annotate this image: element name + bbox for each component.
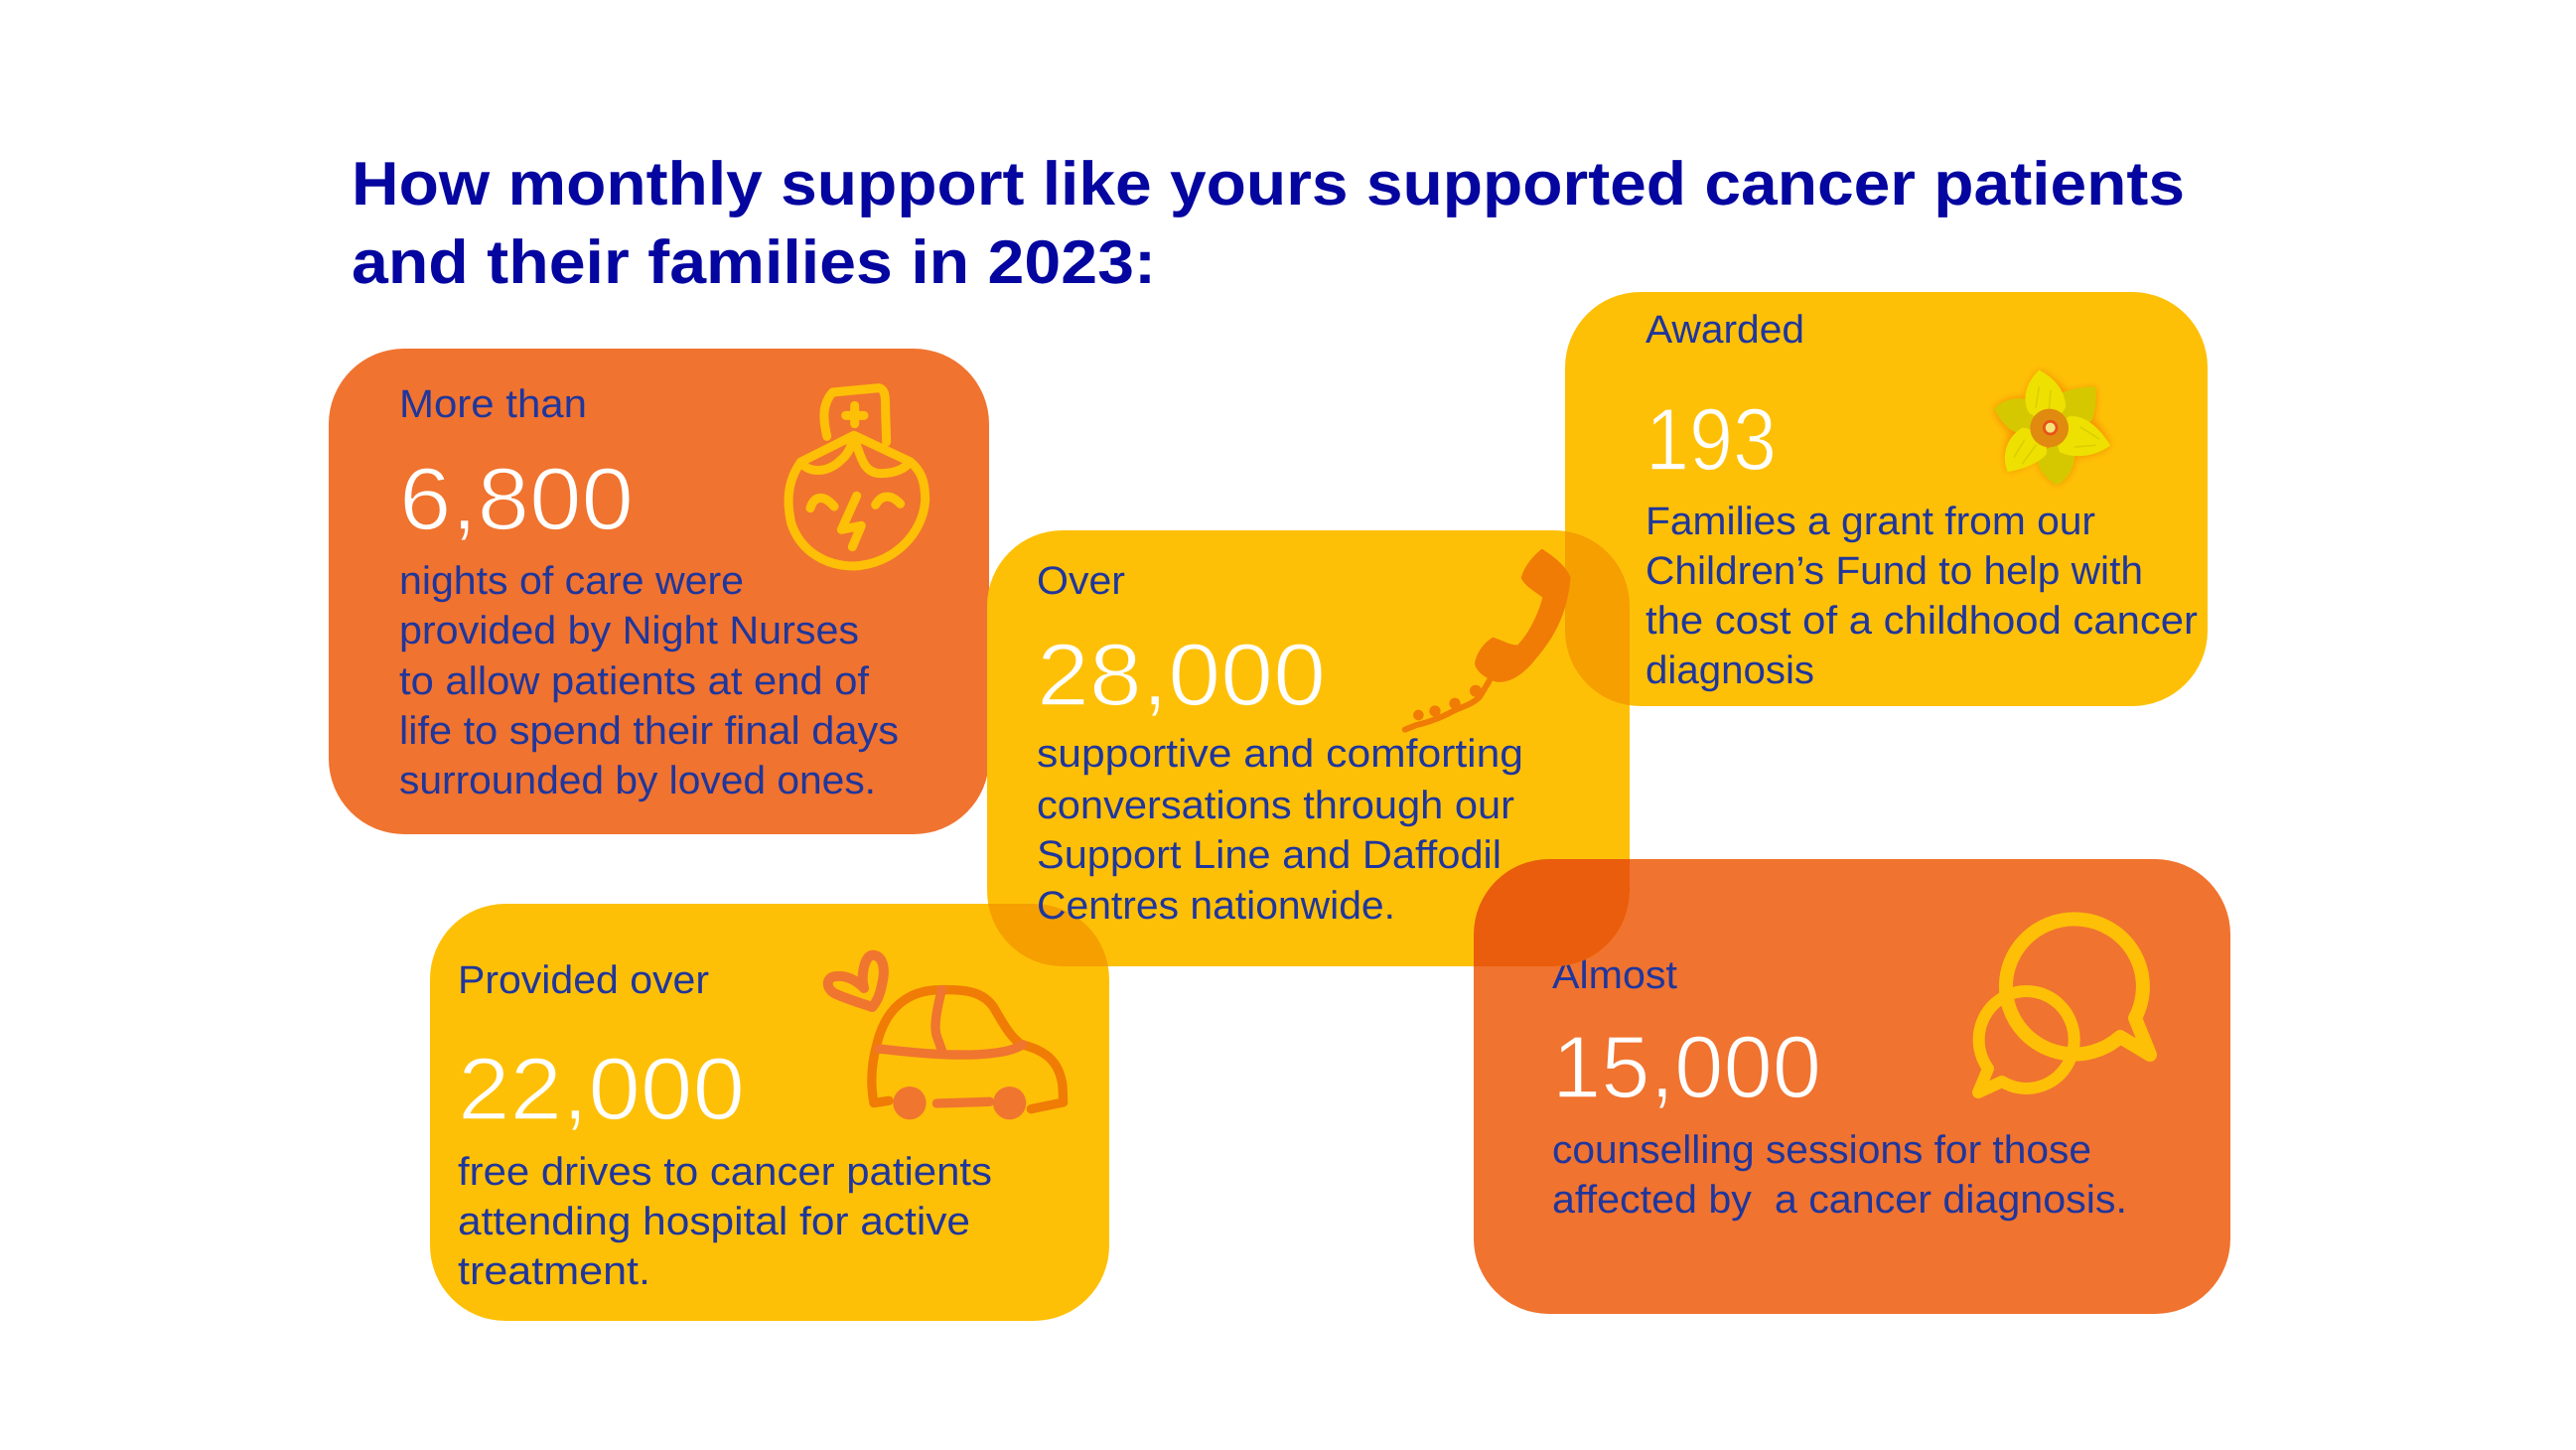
- panel: children's fund: the cost of a childhood cancer: [1646, 599, 2198, 643]
- panel: driving: attending hospital for active: [458, 1200, 970, 1243]
- title: How monthly support like yours supported cancer patients: [352, 150, 2185, 218]
- panel: children's fund: [1565, 292, 2208, 706]
- panel: support line: Over: [1037, 559, 1125, 603]
- panel: night nursing: to allow patients at end of: [399, 659, 870, 703]
- panel: counselling: 15,000: [1552, 1017, 1821, 1116]
- icon: speech bubbles: [1978, 919, 2150, 1092]
- icon: car and heart: [828, 955, 1064, 1119]
- panel: night nursing: provided by Night Nurses: [399, 609, 859, 652]
- panel: night nursing: life to spend their final days: [399, 709, 899, 753]
- panel: driving: treatment.: [458, 1249, 650, 1293]
- panel: driving: 22,000: [458, 1039, 745, 1138]
- panel: support line: [987, 530, 1630, 966]
- panel: support line: Centres nationwide.: [1037, 884, 1395, 928]
- panel: night nursing: nights of care were: [399, 559, 744, 603]
- panel: driving: [430, 904, 1109, 1321]
- title: [352, 150, 2185, 297]
- panel: children's fund: 193: [1646, 389, 1777, 489]
- panel: night nursing: surrounded by loved ones.: [399, 759, 876, 802]
- panel: counselling: affected by a cancer diagnosis.: [1552, 1178, 2127, 1222]
- panel: children's fund: Families a grant from our: [1646, 500, 2095, 543]
- panel: support line: conversations through our: [1037, 784, 1514, 827]
- icon: daffodil: [1994, 370, 2110, 485]
- panel: support line: supportive and comforting: [1037, 732, 1523, 776]
- panel: night nursing: More than: [399, 382, 587, 426]
- panel: children's fund: Children’s Fund to help with: [1646, 549, 2143, 593]
- panel: counselling: counselling sessions for those: [1552, 1128, 2091, 1172]
- icon: nurse: [788, 388, 926, 566]
- panel: support line: 28,000: [1037, 625, 1326, 724]
- panel: children's fund: Awarded: [1646, 308, 1804, 352]
- panel: support line: Support Line and Daffodil: [1037, 833, 1502, 877]
- panel: night nursing: [329, 349, 989, 834]
- panel: night nursing: 6,800: [399, 449, 634, 548]
- panel: driving: Provided over: [458, 958, 709, 1002]
- panel: counselling: [1474, 859, 2230, 1314]
- panel: children's fund: diagnosis: [1646, 649, 1814, 692]
- panel: counselling: Almost: [1552, 953, 1677, 997]
- icon: telephone: [1405, 549, 1571, 730]
- panel: driving: free drives to cancer patients: [458, 1150, 992, 1194]
- title: and their families in 2023:: [352, 228, 1156, 297]
